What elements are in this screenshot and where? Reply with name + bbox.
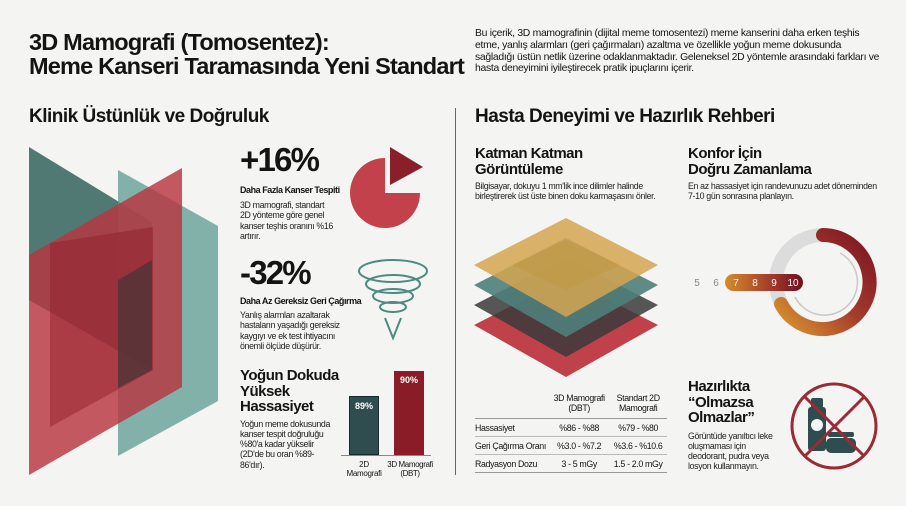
comparison table: %86 - %88 bbox=[559, 422, 599, 432]
bar chart bbox=[341, 371, 433, 478]
icon: cycle dial: 9 bbox=[771, 278, 777, 289]
icon: funnel bbox=[358, 259, 428, 341]
stat: +16%: 3D mamografi, standart 2D yönteme göre genel kanser teşhis oranını %16 artırır. bbox=[240, 200, 333, 241]
section: layered imaging: Bilgisayar, dokuyu 1 mm'lik ince dilimler halinde bbox=[475, 181, 643, 191]
section: preparation: Görüntüde yanıltıcı leke oluşmaması için deodorant, pudra veya losyon kullanmayın. bbox=[688, 430, 773, 471]
heading: patient: Hasta Deneyimi ve Hazırlık Rehberi bbox=[475, 106, 775, 127]
stat: -32% bbox=[240, 254, 362, 351]
stat: +16% bbox=[240, 141, 340, 241]
icon: cycle dial: 7 bbox=[733, 278, 739, 289]
stat: dense tissue bbox=[240, 367, 340, 470]
stat: -32%: Yanlış alarmları azaltarak hastaların yaşadığı gereksiz kaygıyı ve ek test ihtiyacını önemli ölçüde düşürür. bbox=[240, 310, 340, 351]
bar chart: 2D bbox=[359, 460, 369, 469]
divider bbox=[455, 108, 456, 475]
comparison table: 3 - 5 mGy bbox=[561, 458, 597, 468]
section: timing: En az hassasiyet için randevunuzu adet döneminden bbox=[688, 181, 877, 191]
title: Meme Kanseri Taramasında Yeni Standart bbox=[29, 53, 464, 79]
section: timing: 7-10 gün sonrasına planlayın. bbox=[688, 191, 794, 201]
stat: dense tissue: Yoğun meme dokusunda kanser tespit doğruluğu %80'a kadar yükselir (2D'de bu oran %89-86'dır). bbox=[240, 418, 330, 470]
section: preparation: Hazırlıkta bbox=[688, 378, 750, 395]
comparison table: Radyasyon Dozu bbox=[475, 458, 537, 468]
bar chart: 3D Mamografi bbox=[387, 460, 433, 469]
section: timing: Doğru Zamanlama bbox=[688, 160, 811, 178]
icon: cycle dial: 6 bbox=[713, 278, 719, 289]
icon: stacked layers bbox=[474, 218, 658, 377]
stat: dense tissue: Yüksek bbox=[240, 382, 290, 400]
comparison table bbox=[475, 393, 667, 473]
bar chart: 90% bbox=[400, 375, 418, 385]
icon: cycle dial: 10 bbox=[787, 278, 799, 289]
title bbox=[29, 29, 465, 79]
comparison table: %3.0 - %7.2 bbox=[557, 440, 601, 450]
comparison table: %79 - %80 bbox=[618, 422, 658, 432]
comparison table: Hassasiyet bbox=[475, 422, 515, 432]
stat: -32%: -32% bbox=[240, 254, 310, 291]
bar chart: Mamografi bbox=[346, 469, 382, 478]
bar chart: 89% bbox=[355, 401, 373, 411]
section: preparation: Olmazlar” bbox=[688, 409, 754, 426]
icon: no cosmetics bbox=[790, 382, 878, 470]
section: timing bbox=[688, 145, 877, 201]
icon: pie chart bbox=[350, 147, 423, 228]
comparison table: Geri Çağırma Oranı bbox=[475, 440, 546, 450]
title: 3D Mamografi (Tomosentez): bbox=[29, 29, 329, 55]
comparison table: 3D Mamografi bbox=[554, 393, 605, 403]
heading: clinical: Klinik Üstünlük ve Doğruluk bbox=[29, 106, 269, 127]
comparison table: 1.5 - 2.0 mGy bbox=[614, 458, 663, 468]
section: layered imaging: birleştirerek üst üste binen doku karmaşasını önler. bbox=[475, 191, 655, 201]
comparison table: %3.6 - %10.6 bbox=[614, 440, 662, 450]
section: layered imaging bbox=[475, 145, 655, 201]
stat: dense tissue: Yoğun Dokuda bbox=[240, 367, 339, 384]
comparison table: Mamografi bbox=[619, 403, 657, 413]
section: layered imaging: Katman Katman bbox=[475, 145, 583, 162]
graphic: layered planes bbox=[29, 147, 218, 475]
stat: +16%: Daha Fazla Kanser Tespiti bbox=[240, 185, 340, 195]
stat: +16%: +16% bbox=[240, 141, 318, 178]
section: preparation: “Olmazsa bbox=[688, 394, 753, 410]
icon: cycle dial: 5 bbox=[694, 278, 700, 289]
intro text: Bu içerik, 3D mamografinin (dijital meme tomosentezi) meme kanserini daha erken teşhis etme, yanlış alarmları (geri çağırmaları) azaltma ve özellikle yoğun meme dokusunda sağladığı üstün netlik üzerine odaklanmaktadır. Geleneksel 2D yöntemle arasındaki farkları ve hasta deneyimini iyileştirecek pratik ipuçlarını içerir. bbox=[475, 28, 879, 74]
section: preparation bbox=[688, 378, 773, 471]
comparison table: (DBT) bbox=[568, 403, 590, 413]
icon: cycle dial bbox=[694, 228, 877, 336]
icon: cycle dial: 8 bbox=[752, 278, 758, 289]
stat: -32%: Daha Az Gereksiz Geri Çağırma bbox=[240, 296, 361, 306]
section: timing: Konfor İçin bbox=[688, 145, 762, 162]
section: layered imaging: Görüntüleme bbox=[475, 160, 563, 178]
bar chart: (DBT) bbox=[400, 469, 420, 478]
stat: dense tissue: Hassasiyet bbox=[240, 398, 313, 415]
comparison table: Standart 2D bbox=[617, 393, 660, 403]
